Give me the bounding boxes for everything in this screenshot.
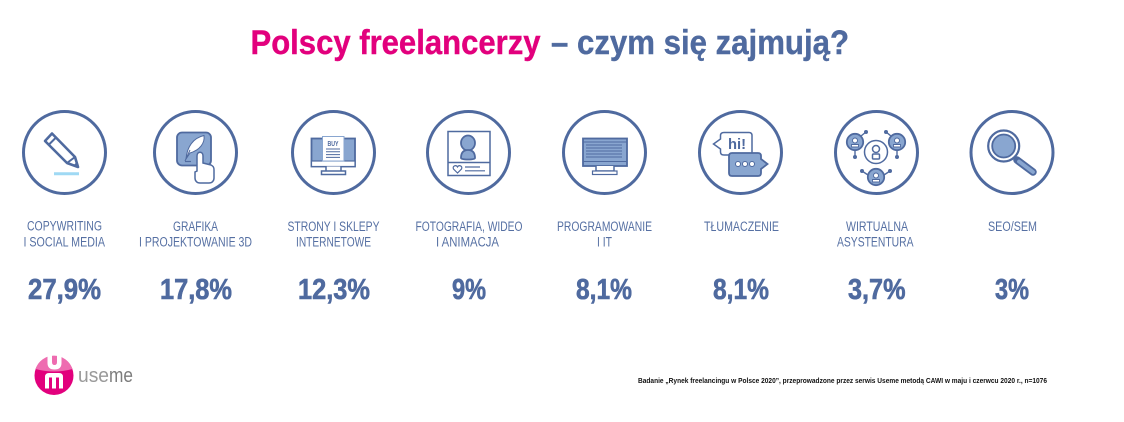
panel: fotografia [416,112,522,306]
value: 3,7% [848,274,906,306]
icon: computer monitor with code [564,112,646,194]
label: STRONY I SKLEPY [288,219,380,234]
label: ASYSTENTURA [837,234,914,250]
icon: network of people [836,112,918,194]
value: 8,1% [713,274,769,306]
label: I ANIMACJA [436,234,499,250]
logo: useme: me [109,365,133,387]
label [557,219,652,250]
icon: monitor with page: BUY [328,141,339,148]
label [139,219,252,250]
value: 17,8% [160,274,232,306]
label: I PROJEKTOWANIE 3D [139,234,252,250]
value: 12,3% [298,274,370,306]
source note: Badanie „Rynek freelancingu w Polsce 2020”, przeprowadzone przez serwis Useme metodą CAWI w maju i czerwcu 2020 r., n=1076 [638,378,1047,385]
label: COPYWRITING [27,218,102,234]
icon: monitor with page [292,112,374,194]
icon: profile photo card [428,112,510,194]
icon: tablet with feather and hand [154,112,236,194]
label: PROGRAMOWANIE [557,219,652,234]
panel: tlumaczenie [700,112,782,306]
title: – czym się zajmują? [551,24,849,62]
panel: wirtualna asystentura [836,112,918,306]
label: TŁUMACZENIE [704,219,779,234]
panel: programowanie [557,112,652,306]
title [250,24,849,62]
value: 27,9% [28,274,101,306]
logo: useme [34,355,133,395]
label [837,219,914,250]
label: SEO/SEM [988,219,1037,234]
panel: seo/sem [971,112,1053,306]
value: 8,1% [576,274,632,306]
label [24,218,105,250]
label [416,219,522,250]
title: Polscy freelancerzy [250,24,541,62]
label: WIRTUALNA [846,219,908,234]
value: 3% [995,274,1029,306]
panel: strony [288,112,380,306]
icon: pencil [24,112,106,194]
icon: speech bubbles [700,112,782,194]
icon: speech bubbles: hi! [728,137,746,153]
icon: magnifying glass [971,112,1053,194]
label: I SOCIAL MEDIA [24,234,105,250]
panel: copywriting [24,112,106,306]
panel: grafika [139,112,252,306]
logo: useme: use [78,365,109,387]
label: INTERNETOWE [296,234,371,250]
label: I IT [597,234,612,250]
label: GRAFIKA [173,219,218,234]
value: 9% [452,274,486,306]
label: FOTOGRAFIA, WIDEO [416,219,522,234]
label [288,219,380,250]
